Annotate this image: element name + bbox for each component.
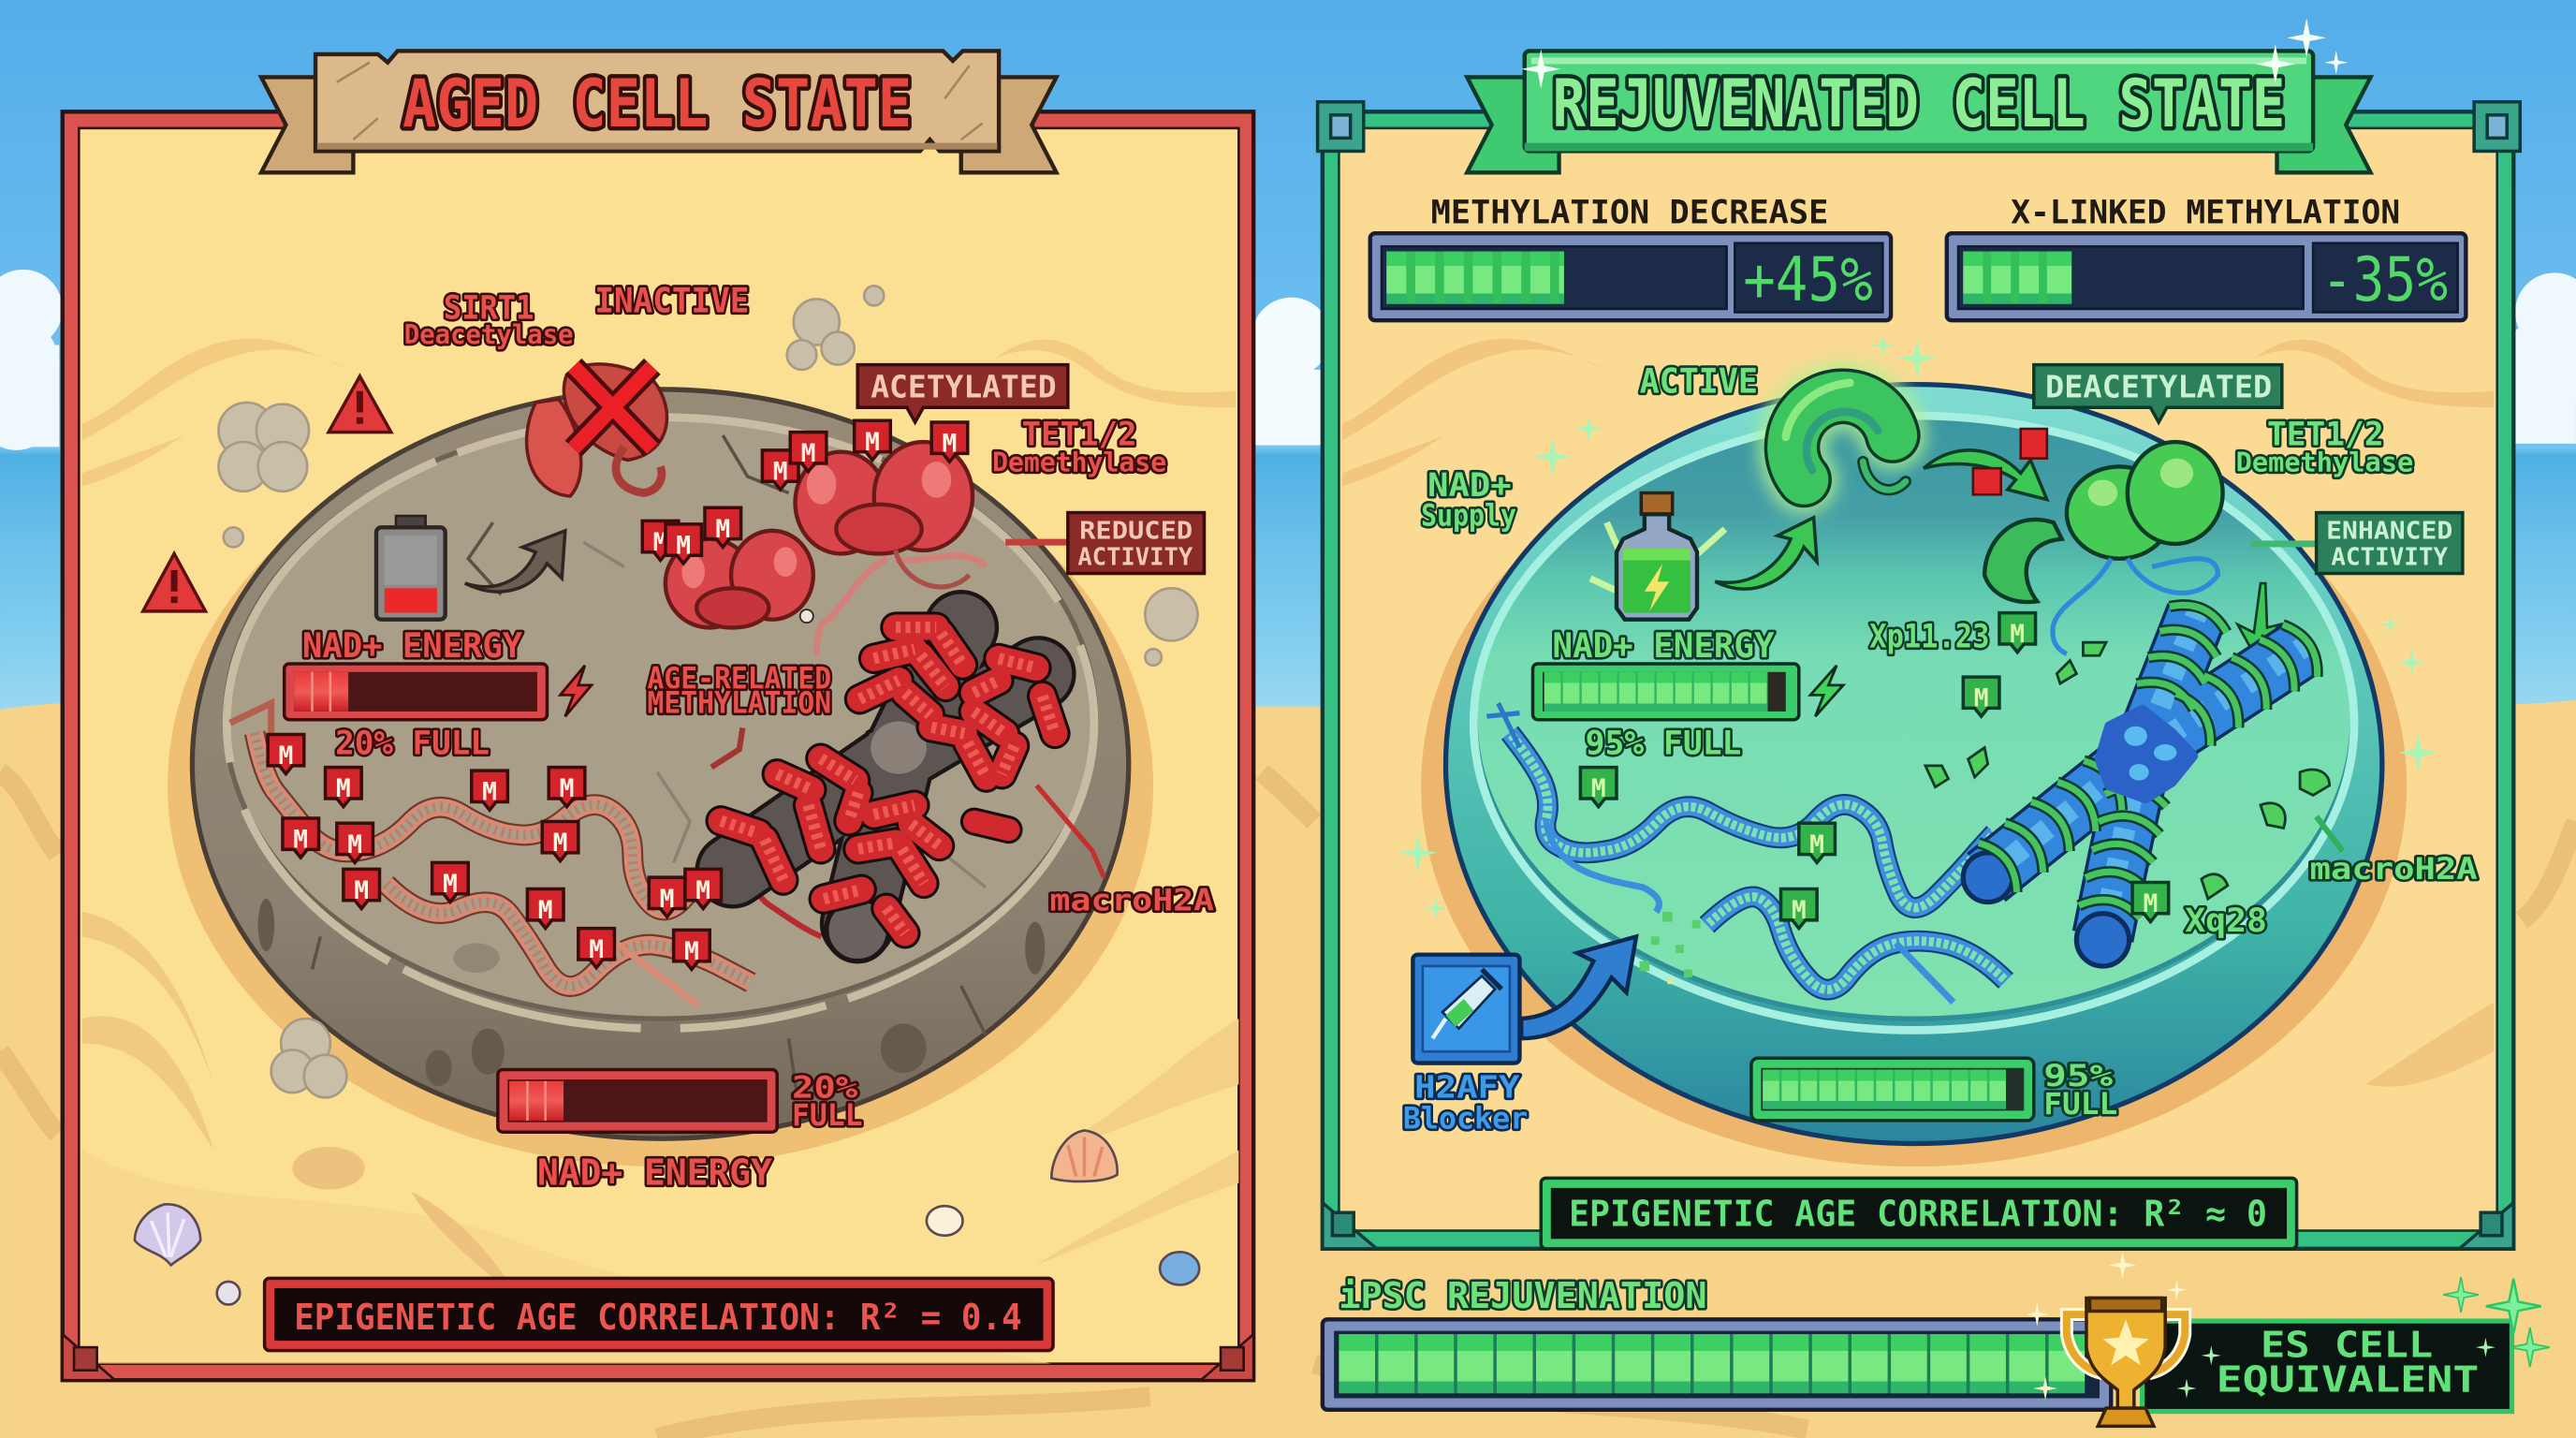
title: rejuvenated: REJUVENATED CELL STATE	[1553, 66, 2285, 142]
label: bottom 95 percent full: 95%	[2043, 1060, 2113, 1093]
label: bottom 95 percent full	[2043, 1060, 2117, 1122]
panel frame: rejuvenated	[1323, 111, 2513, 1249]
bar: +45%	[1743, 245, 1873, 315]
banner: rejuvenated cell state	[1467, 18, 2371, 172]
label: macroH2A: macroH2A	[1050, 884, 1214, 917]
label: TET1/2: TET1/2	[2267, 416, 2384, 454]
bar: NAD+ energy 20 percent	[285, 664, 547, 720]
label: age-related methylation: METHYLATION	[648, 687, 831, 721]
methylation tags: aged: M	[443, 871, 458, 899]
callout: ES cell equivalent	[2143, 1321, 2511, 1412]
bar	[1947, 233, 2466, 320]
bar: iPSC progress	[1323, 1319, 2111, 1410]
methylation tags: aged: M	[553, 829, 567, 858]
loose histone fragments	[1925, 642, 2330, 899]
methylation tags: aged: M	[660, 886, 675, 914]
methylation tags: aged	[268, 420, 968, 969]
TET enzymes: rejuvenated	[1984, 442, 2223, 654]
icon: warning triangles	[143, 376, 391, 611]
label: Deacetylase: Deacetylase	[404, 319, 574, 350]
SIRT1 active enzyme	[1786, 383, 1906, 490]
bar	[1370, 233, 1891, 320]
methylation tags: aged: M	[676, 532, 691, 560]
methylation tags: aged: M	[865, 429, 880, 457]
label: active: ACTIVE	[1640, 360, 1758, 401]
arrow: battery to enzyme	[465, 531, 565, 592]
label: Xp11.23: Xp11.23	[1869, 617, 1989, 655]
callout: ES cell equivalent: ES CELL	[2261, 1325, 2433, 1367]
methylation tags: rejuvenated: M	[2143, 890, 2158, 918]
sky and sea background	[0, 0, 2576, 723]
label: H2AFY blocker: Blocker	[1403, 1103, 1528, 1137]
methylation tags: rejuvenated: M	[1591, 775, 1606, 803]
callout: reduced activity	[1005, 513, 1204, 574]
methylation tags: aged: M	[482, 779, 497, 807]
shells and pebbles	[135, 1130, 1199, 1304]
corner ornaments: rejuvenated	[1318, 102, 2520, 1249]
SIRT1 inactive enzyme	[527, 364, 667, 496]
label: bottom 20 percent full: FULL	[792, 1099, 862, 1133]
sand ripples: rejuvenated panel	[1342, 339, 2494, 1087]
clouds	[0, 270, 2576, 450]
callout: acetylated: ACETYLATED	[871, 369, 1057, 405]
panel: rejuvenated cell state	[1318, 18, 2520, 1249]
label: inactive: INACTIVE	[594, 280, 749, 320]
DNA strands: rejuvenated	[1486, 703, 2006, 1003]
label: age-related methylation	[648, 662, 831, 721]
methylation tags: aged: M	[684, 938, 699, 966]
icon: green lightning	[1810, 666, 1843, 716]
label: Demethylase: Demethylase	[2236, 448, 2413, 478]
label: X-LINKED METHYLATION	[2011, 194, 2400, 232]
label: NAD+ energy: NAD+ ENERGY	[1553, 625, 1775, 666]
callout: deacetylated: DEACETYLATED	[2045, 369, 2272, 405]
epigenetic age correlation: aged: EPIGENETIC AGE CORRELATION: R² = 0.4	[294, 1297, 1022, 1339]
label: Xq28: Xq28	[2185, 902, 2267, 940]
metric: x-linked methylation	[1947, 194, 2466, 320]
bar: bottom NAD+ energy 95 percent	[1751, 1058, 2034, 1121]
chromosome: rejuvenated	[1963, 605, 2318, 966]
label: age-related methylation: AGE-RELATED	[648, 662, 831, 696]
methylation tags: rejuvenated: M	[1809, 831, 1824, 859]
icon: red X	[574, 366, 652, 448]
epigenetic age correlation: rejuvenated	[1541, 1178, 2297, 1249]
methylation tags: aged: M	[773, 458, 788, 486]
label: bottom 20 percent full	[792, 1071, 862, 1133]
bar: bottom NAD+ energy 20 percent	[498, 1070, 777, 1132]
sand background	[0, 700, 2576, 1438]
label: NAD+ energy: NAD+ ENERGY	[302, 625, 523, 666]
label: H2AFY blocker	[1403, 1068, 1528, 1137]
title: aged: AGED CELL STATE	[402, 66, 912, 142]
sand ripples: aged panel	[82, 339, 1238, 1364]
panel frame: aged	[63, 111, 1253, 1380]
methylation tags: aged: M	[354, 877, 369, 905]
sand dunes outside panels	[0, 772, 2576, 1438]
callout: acetylated	[857, 365, 1068, 422]
DNA strands: aged	[230, 703, 822, 1005]
label: NAD+ supply: Supply	[1421, 500, 1516, 534]
methylation tags: aged: M	[560, 775, 574, 803]
methylation tags: aged: M	[589, 936, 604, 964]
methylation tags: aged: M	[653, 529, 668, 557]
bar: -35%	[2321, 245, 2448, 315]
corner ornaments: aged	[63, 1334, 1253, 1380]
callout: enhanced activity	[2250, 513, 2463, 574]
callout: reduced activity: ACTIVITY	[1077, 543, 1193, 571]
histone fragment: aged	[974, 822, 1009, 829]
callout: enhanced activity: ENHANCED	[2326, 517, 2452, 545]
callout: deacetylated	[2034, 365, 2282, 422]
label: bottom NAD+ energy: NAD+ ENERGY	[537, 1152, 773, 1194]
methylation tags: rejuvenated: M	[2010, 621, 2025, 649]
panel: aged cell state	[63, 51, 1253, 1380]
methylation tags: rejuvenated: M	[1974, 685, 1989, 713]
label: macroH2A: macroH2A	[2310, 853, 2478, 887]
cell dish: rejuvenated	[1421, 385, 2407, 1167]
cut DNA fragments	[1640, 912, 1701, 984]
epigenetic age correlation: aged	[265, 1278, 1053, 1351]
macroH2A pointer	[1036, 785, 1104, 877]
epigenetic age correlation: rejuvenated: EPIGENETIC AGE CORRELATION: R² ≈ 0	[1569, 1193, 2267, 1235]
label: bottom 20 percent full: 20%	[792, 1071, 857, 1105]
arrow: blocker to DNA	[1521, 936, 1636, 1038]
label: SIRT1: SIRT1	[444, 288, 534, 327]
bar: NAD+ energy 95 percent	[1532, 664, 1799, 720]
sparkles: trophy and corner	[2026, 1252, 2550, 1401]
label: METHYLATION DECREASE	[1431, 194, 1828, 232]
callout: ES cell equivalent: EQUIVALENT	[2217, 1359, 2479, 1401]
macroH2A pointer	[2317, 816, 2343, 851]
methylation tags: aged: M	[801, 440, 815, 468]
label: NAD+ supply: NAD+	[1427, 466, 1512, 505]
craters and cracks	[258, 899, 1045, 1086]
methylation tags: aged: M	[279, 742, 293, 770]
sparkles: banner	[1521, 18, 2348, 89]
label: TET1/2: TET1/2	[1022, 416, 1137, 454]
methylation tags: rejuvenated	[1580, 613, 2169, 929]
chromosome: aged	[721, 627, 1055, 961]
arrow: small methylation pointer	[711, 727, 742, 768]
label: 95 percent full: 95% FULL	[1586, 725, 1741, 763]
label: NAD+ supply	[1421, 466, 1516, 534]
sparkles: rejuvenated cell	[1398, 333, 2438, 920]
label: H2AFY blocker: H2AFY	[1414, 1068, 1519, 1105]
arrow: potion to enzyme	[1715, 518, 1817, 589]
label: iPSC rejuvenation: iPSC REJUVENATION	[1339, 1275, 1707, 1317]
methylation tags: aged: M	[943, 431, 957, 459]
methylation tags: aged: M	[347, 831, 362, 859]
TET enzymes: aged	[666, 442, 986, 653]
metric: methylation decrease	[1370, 194, 1891, 320]
icon: NAD+ potion	[1590, 493, 1725, 620]
banner: aged cell state	[261, 51, 1057, 172]
callout: enhanced activity: ACTIVITY	[2331, 543, 2449, 571]
methylation tags: aged: M	[336, 775, 351, 803]
icon: trophy	[2067, 1298, 2185, 1426]
methylation tags: aged: M	[715, 516, 730, 544]
methylation tags: aged: M	[538, 897, 553, 925]
callout: reduced activity: REDUCED	[1079, 517, 1193, 545]
cell dish: aged	[168, 389, 1153, 1167]
icon: lightning	[561, 666, 592, 716]
label: 20 percent full: 20% FULL	[335, 725, 490, 763]
dust clouds	[218, 286, 1197, 1097]
methylation tags: rejuvenated: M	[1792, 897, 1807, 925]
iPSC rejuvenation progress	[1323, 1252, 2550, 1426]
removed methyl groups	[1973, 429, 2047, 494]
arrow: TET to chromosome	[2237, 583, 2280, 654]
methylation tags: aged: M	[695, 877, 710, 905]
label: bottom 95 percent full: FULL	[2043, 1088, 2117, 1122]
methylation tags: aged: M	[293, 827, 308, 855]
icon: H2AFY blocker	[1412, 955, 1519, 1064]
label: Demethylase: Demethylase	[992, 448, 1166, 478]
arrow: enzyme to TET	[1924, 450, 2047, 500]
icon: low battery	[376, 516, 446, 620]
